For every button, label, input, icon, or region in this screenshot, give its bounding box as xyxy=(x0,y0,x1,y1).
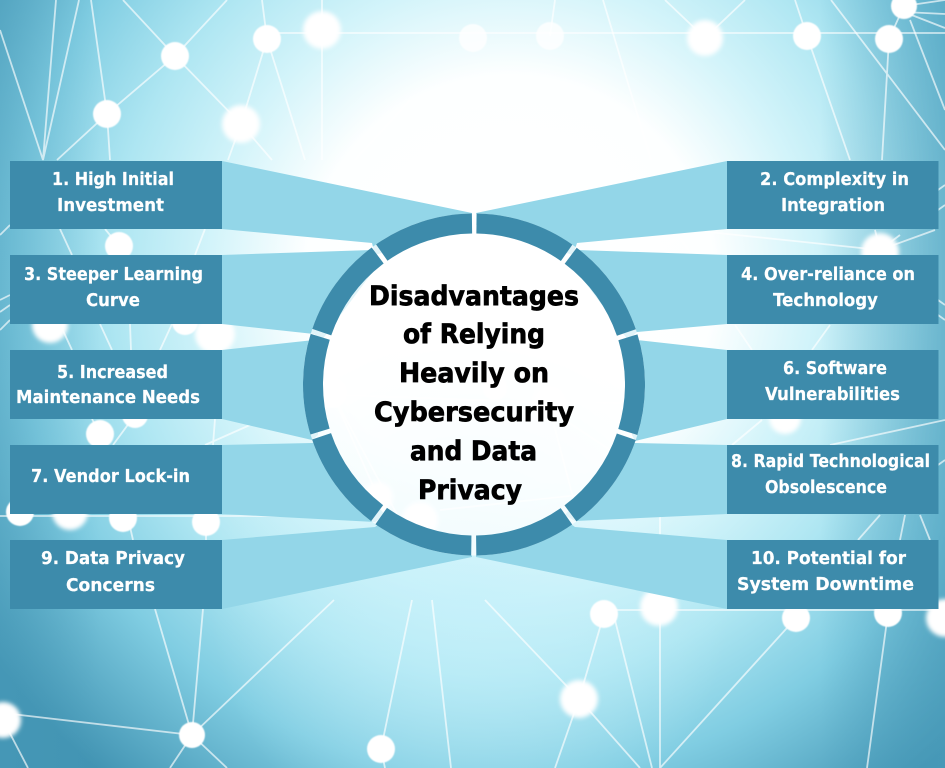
title: of Relying xyxy=(403,319,545,350)
label 3: Curve xyxy=(86,291,140,311)
label 4: Technology xyxy=(773,291,879,311)
connector 6 xyxy=(630,340,727,441)
connector 8 xyxy=(565,440,727,521)
panel: item 9 Data Privacy Concerns xyxy=(10,520,472,609)
label 9: 9. Data Privacy xyxy=(41,549,186,569)
connector 5 xyxy=(222,340,320,440)
box 8 xyxy=(727,445,938,514)
label 7: 7. Vendor Lock-in xyxy=(31,467,190,487)
label 2: 2. Complexity in xyxy=(760,170,909,190)
title: Cybersecurity xyxy=(374,397,574,428)
connector 4 xyxy=(570,250,727,340)
connector 7 xyxy=(222,440,385,522)
box 10 xyxy=(727,540,938,609)
connector 2 xyxy=(476,161,727,255)
title: Disadvantages xyxy=(369,281,579,312)
segmented ring xyxy=(310,221,638,548)
label 2: Integration xyxy=(781,196,885,216)
label 5: 5. Increased xyxy=(57,363,168,383)
label 6: 6. Software xyxy=(783,359,887,379)
box 3 xyxy=(10,255,222,324)
panel: item 1 High Initial Investment xyxy=(10,161,472,255)
box 2 xyxy=(727,161,938,229)
label 5: Maintenance Needs xyxy=(16,388,200,408)
panel: item 10 Potential for System Downtime xyxy=(476,520,938,609)
label 6: Vulnerabilities xyxy=(765,385,900,405)
central circle xyxy=(303,214,645,556)
label 3: 3. Steeper Learning xyxy=(24,265,203,285)
connector 10 xyxy=(476,520,727,609)
panel: item 6 Software Vulnerabilities xyxy=(630,340,938,441)
label 1: Investment xyxy=(57,196,164,216)
box 5 xyxy=(10,350,222,419)
label 10: System Downtime xyxy=(737,575,914,595)
box 6 xyxy=(727,350,938,419)
box 1 xyxy=(10,161,222,229)
connector 3 xyxy=(222,250,380,340)
panel: item 7 Vendor Lock-in xyxy=(10,440,385,522)
title: Privacy xyxy=(418,475,522,506)
box 9 xyxy=(10,540,222,609)
box 4 xyxy=(727,255,938,324)
box 7 xyxy=(10,445,222,514)
connector 9 xyxy=(222,520,472,609)
panel: item 8 Rapid Technological Obsolescence xyxy=(565,440,938,521)
panel: item 4 Over-reliance on Technology xyxy=(570,250,938,340)
title: and Data xyxy=(410,436,537,467)
title: Heavily on xyxy=(399,358,549,389)
label 9: Concerns xyxy=(66,576,155,596)
label 4: 4. Over-reliance on xyxy=(741,265,915,285)
connector 1 xyxy=(222,161,472,255)
panel: item 5 Increased Maintenance Needs xyxy=(10,340,320,440)
panel: item 3 Steeper Learning Curve xyxy=(10,250,380,340)
label 8: Obsolescence xyxy=(765,478,887,498)
label 10: 10. Potential for xyxy=(751,549,906,569)
panel: item 2 Complexity in Integration xyxy=(476,161,938,255)
label 1: 1. High Initial xyxy=(52,170,174,190)
